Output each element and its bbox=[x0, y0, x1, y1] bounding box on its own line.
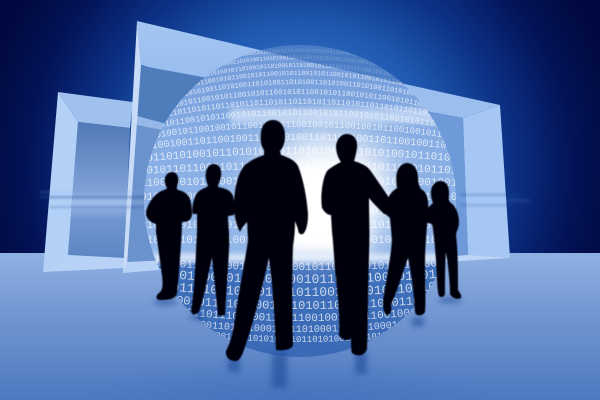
person 1: far left figure bbox=[146, 172, 192, 300]
binary digits wrapped around the globe: 1100100101100100101100100101100100101100100101100100101100 bbox=[158, 121, 442, 138]
person 6: woman far right bbox=[420, 181, 461, 299]
floor bbox=[0, 253, 600, 400]
light streaks across frames bbox=[40, 191, 530, 208]
globe body bbox=[144, 45, 456, 357]
binary digits wrapped around the globe: 1010011011010100110110101001101101010011011010100110110101 bbox=[216, 332, 385, 342]
person 4: large central right figure bbox=[321, 134, 392, 355]
background: deep blue radial glow bbox=[0, 0, 600, 256]
large central glass frame bbox=[123, 21, 400, 273]
binary digits wrapped around the globe: 1001010110010101100101011001010110010101100101011001010110010 bbox=[162, 109, 438, 127]
left glass frame bbox=[43, 92, 133, 272]
binary digits wrapped around the globe: 0110101101101011011010110110101101101011011010110110101101101011 bbox=[169, 98, 431, 116]
foot shadows and reflections bbox=[153, 297, 462, 388]
globe central white glow bbox=[150, 108, 457, 262]
person 5: woman second from right bbox=[383, 163, 428, 315]
person 3: large central left figure bbox=[226, 120, 308, 361]
silhouettes: group of six people bbox=[146, 120, 461, 361]
binary globe bbox=[144, 45, 456, 357]
right glass frame bbox=[400, 83, 510, 262]
binary digits wrapped around the globe bbox=[144, 48, 456, 342]
person 2: second figure from left bbox=[191, 164, 235, 316]
binary digits wrapped around the globe: 0110100101101001011010010110100101101001011010010110100101101001011010010110100101101001011010010110100101101 bbox=[243, 48, 358, 56]
floor shading bbox=[80, 310, 500, 400]
binary digits wrapped around the globe: 0011010100110101001101010011010100110101001101010011010100110101001101010011 bbox=[185, 79, 416, 96]
binary digits wrapped around the globe: 1110010011011100100110111001001101110010011011100 bbox=[188, 308, 414, 322]
binary digits wrapped around the globe: 1010110010101100101011001010110010101100101011001010110010101100101011 bbox=[176, 89, 424, 107]
binary digits wrapped around the globe: 0011011010001101101000110110100011011010001101101000110 bbox=[201, 320, 399, 332]
globe cap dimmed above the frame edge bbox=[260, 45, 400, 83]
